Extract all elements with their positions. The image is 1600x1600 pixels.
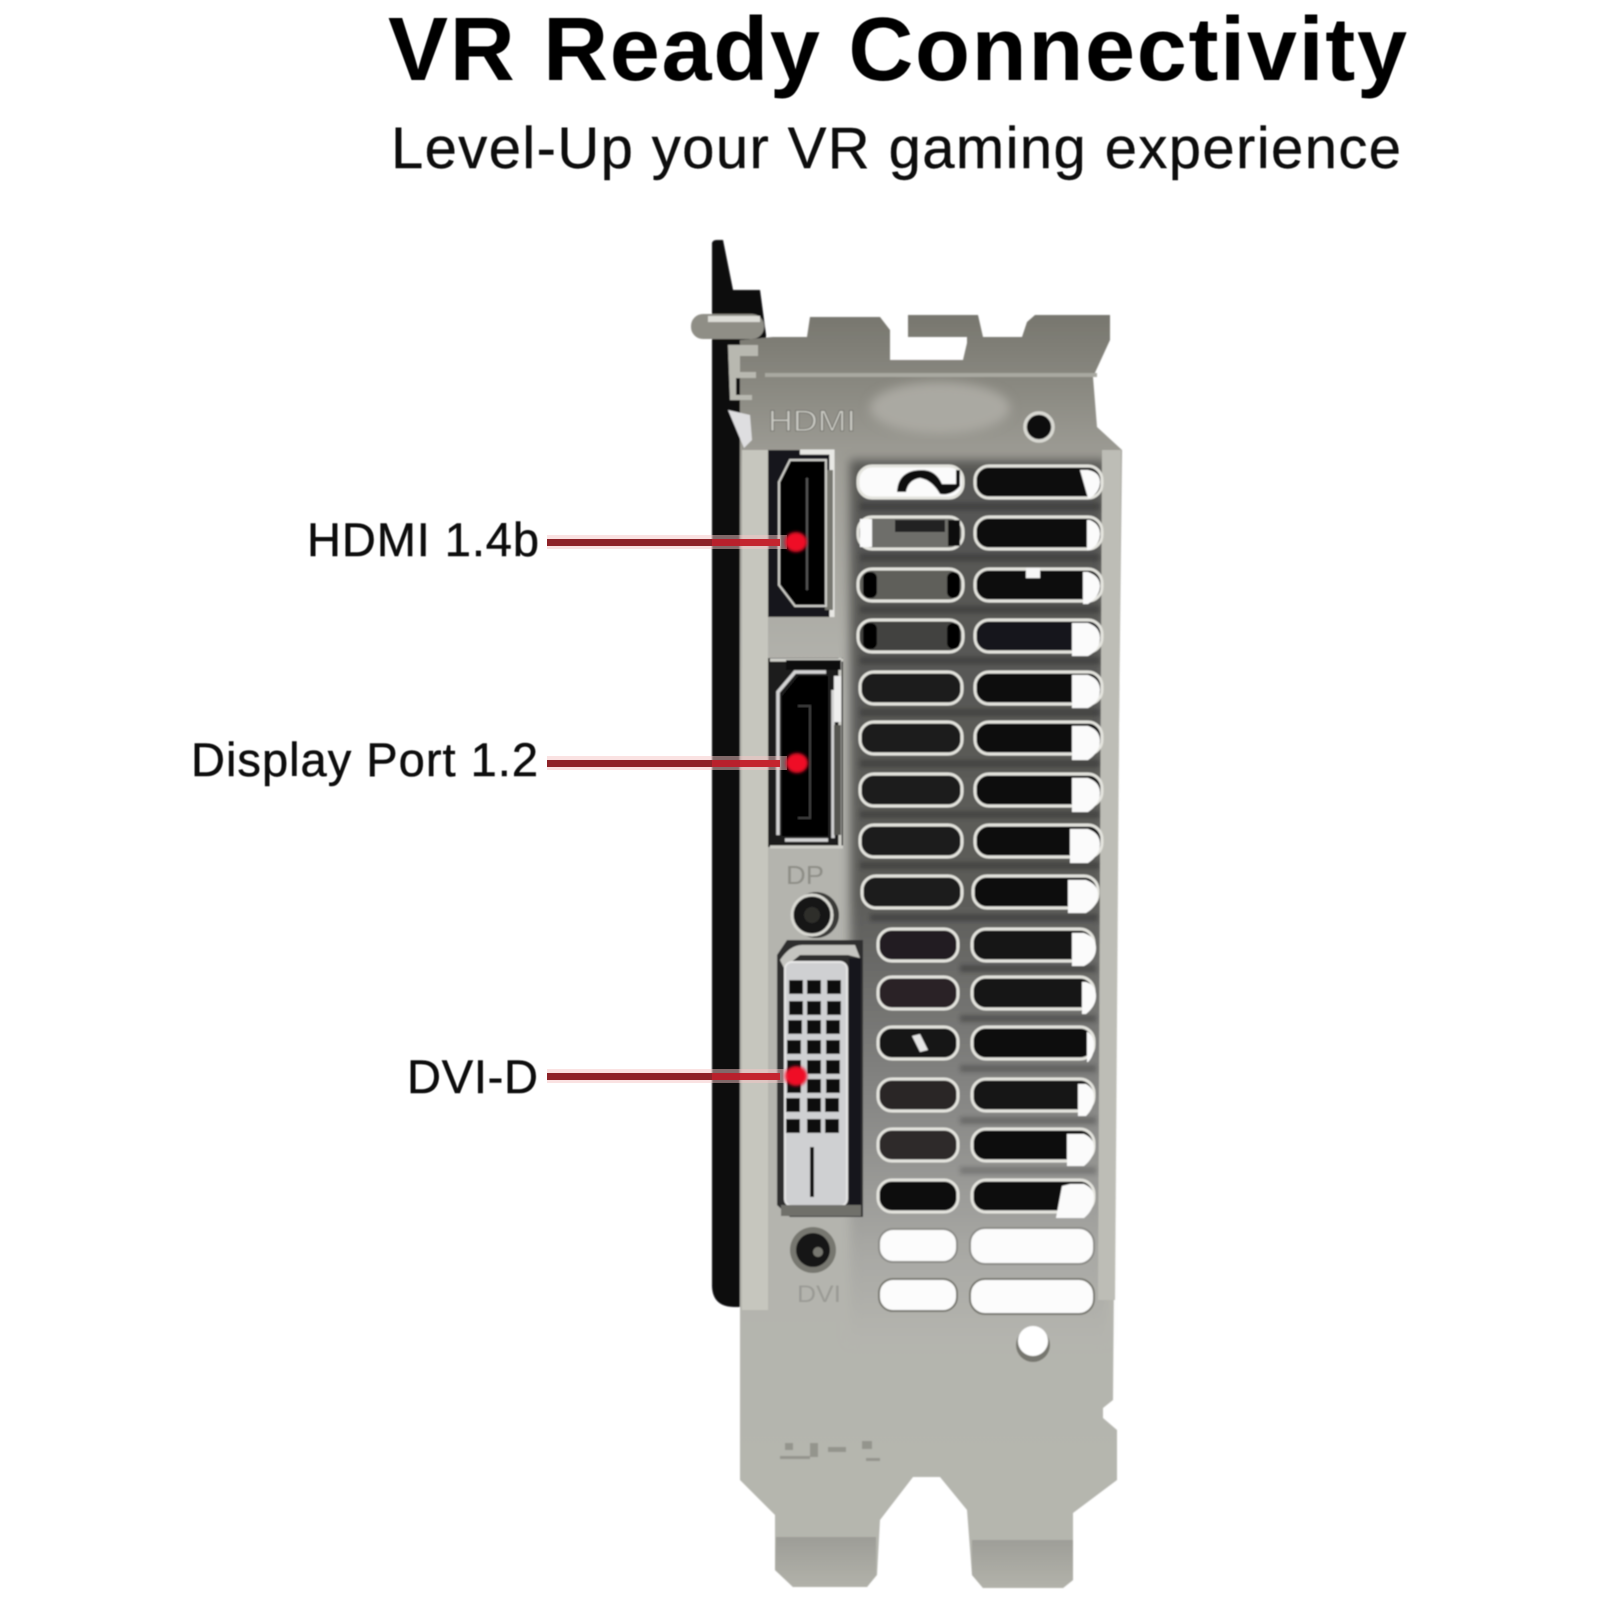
slots row 9 bbox=[862, 876, 1098, 913]
top mounting hole bbox=[1025, 413, 1053, 441]
DVI pins bbox=[786, 980, 841, 1133]
upper screw bbox=[792, 892, 839, 938]
slots row 12 bbox=[878, 1027, 1094, 1062]
label: HDMI 1.4b: HDMI 1.4b bbox=[307, 513, 539, 566]
pointer line bbox=[547, 1066, 807, 1086]
slots row 14 bbox=[878, 1129, 1094, 1166]
metal plate bbox=[740, 315, 1122, 1588]
callout: Display Port 1.2 bbox=[191, 733, 808, 786]
HDMI port bbox=[768, 450, 834, 617]
top fold line bbox=[765, 373, 1097, 377]
lower tab shading bbox=[775, 1537, 1073, 1588]
lower screw bbox=[790, 1227, 836, 1273]
slots row 16 bbox=[879, 1228, 1094, 1264]
dark bands between slots bbox=[860, 503, 1100, 1174]
DVI blade slot bbox=[810, 1147, 814, 1197]
left light strip bbox=[742, 450, 768, 1310]
engraved HDMI label: HDMI bbox=[768, 405, 856, 438]
right edge strip bbox=[1098, 450, 1121, 1300]
slots row 17 bbox=[879, 1279, 1094, 1314]
slots row 7 bbox=[860, 774, 1102, 812]
pointer line bbox=[547, 532, 807, 552]
engraved DP label: DP bbox=[786, 860, 824, 890]
engraved DVI label: DVI bbox=[797, 1281, 841, 1308]
left fragments near flange bbox=[728, 345, 758, 448]
slots row 10 bbox=[878, 929, 1096, 966]
slots row 5 bbox=[860, 672, 1102, 708]
slots row 2 bbox=[858, 517, 1102, 550]
lower mounting hole bbox=[1016, 1326, 1050, 1362]
ventilation slots bbox=[858, 466, 1102, 1314]
graphics card I/O bracket bbox=[691, 240, 1122, 1588]
engraved mark near bottom bbox=[780, 1441, 880, 1461]
slots row 11 bbox=[878, 977, 1096, 1014]
black card edge behind bracket bbox=[712, 240, 766, 1307]
slots row 1 bbox=[858, 466, 1102, 498]
slots row 13 bbox=[878, 1079, 1094, 1116]
pointer line bbox=[547, 753, 808, 773]
subtitle: Level-Up your VR gaming experience bbox=[391, 116, 1401, 181]
shaded vent zone bbox=[850, 460, 1106, 1340]
slots row 15 bbox=[878, 1180, 1094, 1218]
callout: DVI-D bbox=[407, 1050, 807, 1103]
fastening flange bbox=[691, 314, 764, 339]
slots row 4 bbox=[858, 620, 1102, 656]
slots row 6 bbox=[860, 722, 1102, 760]
label: Display Port 1.2: Display Port 1.2 bbox=[191, 733, 538, 786]
callout: HDMI 1.4b bbox=[307, 513, 807, 566]
title: VR Ready Connectivity bbox=[388, 0, 1407, 100]
slots row 3 bbox=[858, 568, 1102, 604]
label: DVI-D: DVI-D bbox=[407, 1050, 538, 1103]
slots row 8 bbox=[860, 825, 1102, 863]
lighter patch on top band bbox=[870, 382, 1010, 434]
DisplayPort port bbox=[768, 658, 843, 847]
DVI-D port bbox=[777, 940, 863, 1217]
